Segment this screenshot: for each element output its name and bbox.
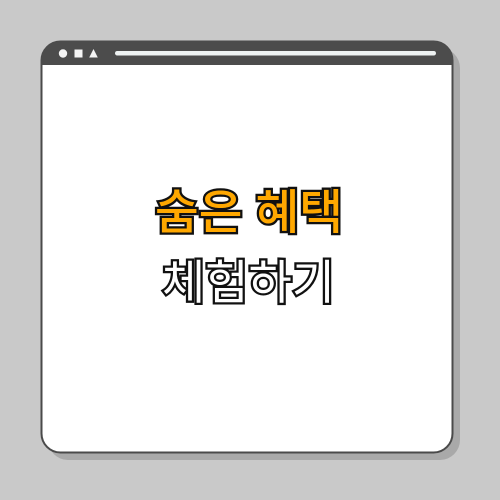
window shadow [48, 48, 460, 460]
heading: white line: 체험하기 [162, 256, 335, 309]
browser window [41, 41, 453, 452]
icon: circle button [59, 49, 67, 58]
icon: triangle button [89, 49, 98, 58]
heading: orange line: 숨은 혜택 [155, 187, 343, 240]
title bar [41, 41, 453, 65]
icon: square button [74, 50, 82, 58]
address bar [115, 51, 436, 56]
